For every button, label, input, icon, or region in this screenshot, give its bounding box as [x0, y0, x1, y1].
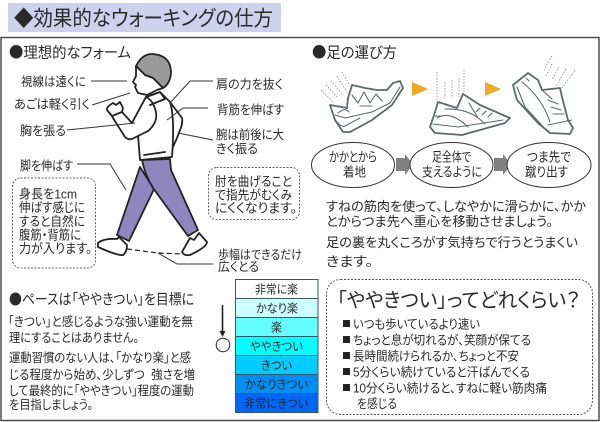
- list: signs: を感じる: [357, 396, 397, 411]
- intensity scale: [236, 280, 318, 412]
- intensity scale: かなりきつい: [245, 378, 308, 392]
- label: stride: 歩幅はできるだけ: [218, 247, 302, 262]
- icon: shoe heel strike: [321, 72, 403, 132]
- callout: height stretch: 力が入ります。: [19, 241, 92, 256]
- hair: [136, 54, 171, 88]
- text block: foot explanation: とからつま先へ重心を移動させましょう。: [326, 214, 553, 229]
- rear arm: [168, 102, 182, 149]
- callout: elbow: 肘を曲げること: [215, 174, 292, 189]
- intensity scale: ややきつい: [250, 340, 303, 354]
- rear leg: [117, 167, 154, 241]
- arrow: down to target: [220, 305, 226, 337]
- text block: pace explanation: を目指しましょう。: [9, 397, 93, 412]
- oval: whole foot: 足全体で: [432, 150, 471, 164]
- panel: ideal form: [9, 42, 302, 274]
- oval: heel landing: 着地: [343, 164, 366, 180]
- label: arm swing: きく振る: [216, 142, 258, 156]
- text block: foot explanation: 足の裏を丸くころがす気持ちで行うとうまくい: [326, 235, 578, 250]
- text block: foot explanation: すねの筋肉を使って、しなやかに滑らかに、かか: [326, 199, 586, 214]
- label: chest: 胸を張る: [20, 123, 66, 138]
- callout: height stretch: [12, 178, 96, 268]
- callout: height stretch: 伸ばす感じに: [19, 200, 85, 215]
- label: back: 背筋を伸ばす: [217, 102, 284, 117]
- label: stride: [158, 247, 302, 274]
- text block: pace explanation: 「きつい」と感じるような強い運動を無: [8, 314, 193, 329]
- intensity scale: 非常にきつい: [244, 396, 308, 410]
- marker circle: [216, 338, 230, 352]
- intensity scale: かなり楽: [256, 302, 298, 316]
- label: leg: [20, 158, 126, 190]
- label: chin: [14, 93, 130, 112]
- oval: whole foot: 支えるように: [422, 164, 482, 180]
- label: gaze: [21, 74, 127, 89]
- cuff line: [112, 112, 122, 116]
- heading: pace: ●ペースは「ややきつい」を目標に: [9, 288, 194, 310]
- icon: shoe toe off: [513, 56, 575, 134]
- front arm and fist: [107, 97, 156, 139]
- text block: foot explanation: きます。: [326, 254, 373, 269]
- text block: pace explanation: [8, 314, 195, 412]
- callout: height stretch: 身長を1cm: [19, 186, 77, 202]
- list: signs: 10分くらい続けると、すねに軽い筋肉痛: [353, 380, 547, 396]
- jacket hem: [144, 152, 165, 155]
- list: signs: いつも歩いているより速い: [353, 316, 480, 332]
- label: stride: 広くとる: [218, 260, 259, 274]
- label: chin: あごは軽く引く: [14, 96, 90, 112]
- intensity scale: 非常に楽: [255, 282, 298, 296]
- label: leg: 脚を伸ばす: [20, 158, 73, 173]
- callout: elbow: で指先がむくみ: [215, 188, 292, 202]
- oval: toe off: [507, 142, 591, 188]
- title band: ◆効果的なウォーキングの仕方: [14, 2, 273, 32]
- face: [133, 66, 163, 95]
- panel: foot movement: [312, 42, 591, 269]
- label: back: [167, 102, 284, 120]
- list: signs: ちょっと息が切れるが、笑顔が保てる: [353, 332, 531, 348]
- label: chest: [20, 123, 135, 138]
- front leg: [142, 159, 198, 236]
- rear shoe: [98, 237, 127, 255]
- label: arm swing: [178, 127, 284, 156]
- intensity scale: きつい: [261, 358, 292, 372]
- front shoe: [182, 233, 207, 255]
- panel: pace: [8, 280, 318, 412]
- list: signs: [343, 316, 547, 411]
- text block: pace explanation: 運動習慣のない人は、「かなり楽」と感: [9, 350, 191, 365]
- label: arm swing: 腕は前後に大: [216, 127, 284, 142]
- callout: height stretch: すると自然に: [19, 214, 85, 229]
- heading: foot movement: ●足の運び方: [312, 42, 397, 62]
- icon: shoe flat: [430, 70, 510, 135]
- arrow: grey 1: [396, 154, 413, 175]
- arrow: orange 1: [412, 82, 428, 96]
- arrow: orange 2: [485, 82, 501, 96]
- list: signs: 長時間続けられるか、ちょっと不安: [353, 350, 519, 364]
- text block: pace explanation: 理にすることはありません。: [9, 331, 139, 345]
- label: shoulder: [170, 76, 283, 103]
- text block: pace explanation: じる程度から始め、少しずつ 強さを増: [9, 367, 195, 382]
- text block: pace explanation: して最終的に「ややきつい」程度の運動: [9, 383, 194, 398]
- dashed stride line: [127, 249, 182, 254]
- oval: whole foot: [410, 142, 493, 188]
- heading: ideal form: ●理想的なフォーム: [9, 42, 131, 62]
- oval: heel landing: [312, 142, 394, 188]
- callout: elbow: にくくなります。: [215, 200, 297, 216]
- walking figure illustration: [98, 54, 207, 255]
- oval: toe off: つま先で: [527, 150, 571, 164]
- callout: height stretch: 腹筋・背筋に: [19, 228, 81, 242]
- oval: heel landing: かかとから: [329, 150, 377, 164]
- list: signs: 5分くらい続けていると汗ばんでくる: [353, 366, 530, 380]
- arrow: grey 2: [494, 154, 511, 175]
- label: shoulder: 肩の力を抜く: [216, 76, 283, 92]
- text block: foot explanation: [326, 199, 586, 269]
- oval: toe off: 蹴り出す: [525, 164, 568, 180]
- intensity scale: 楽: [271, 320, 282, 334]
- label: gaze: 視線は遠くに: [21, 74, 86, 89]
- callout: elbow: [208, 168, 300, 220]
- panel: how hard is somewhat hard: [326, 280, 592, 414]
- jacket body: [132, 92, 173, 160]
- heading: somewhat hard: 「ややきつい」ってどれくらい？: [337, 289, 580, 312]
- collar: [146, 92, 165, 105]
